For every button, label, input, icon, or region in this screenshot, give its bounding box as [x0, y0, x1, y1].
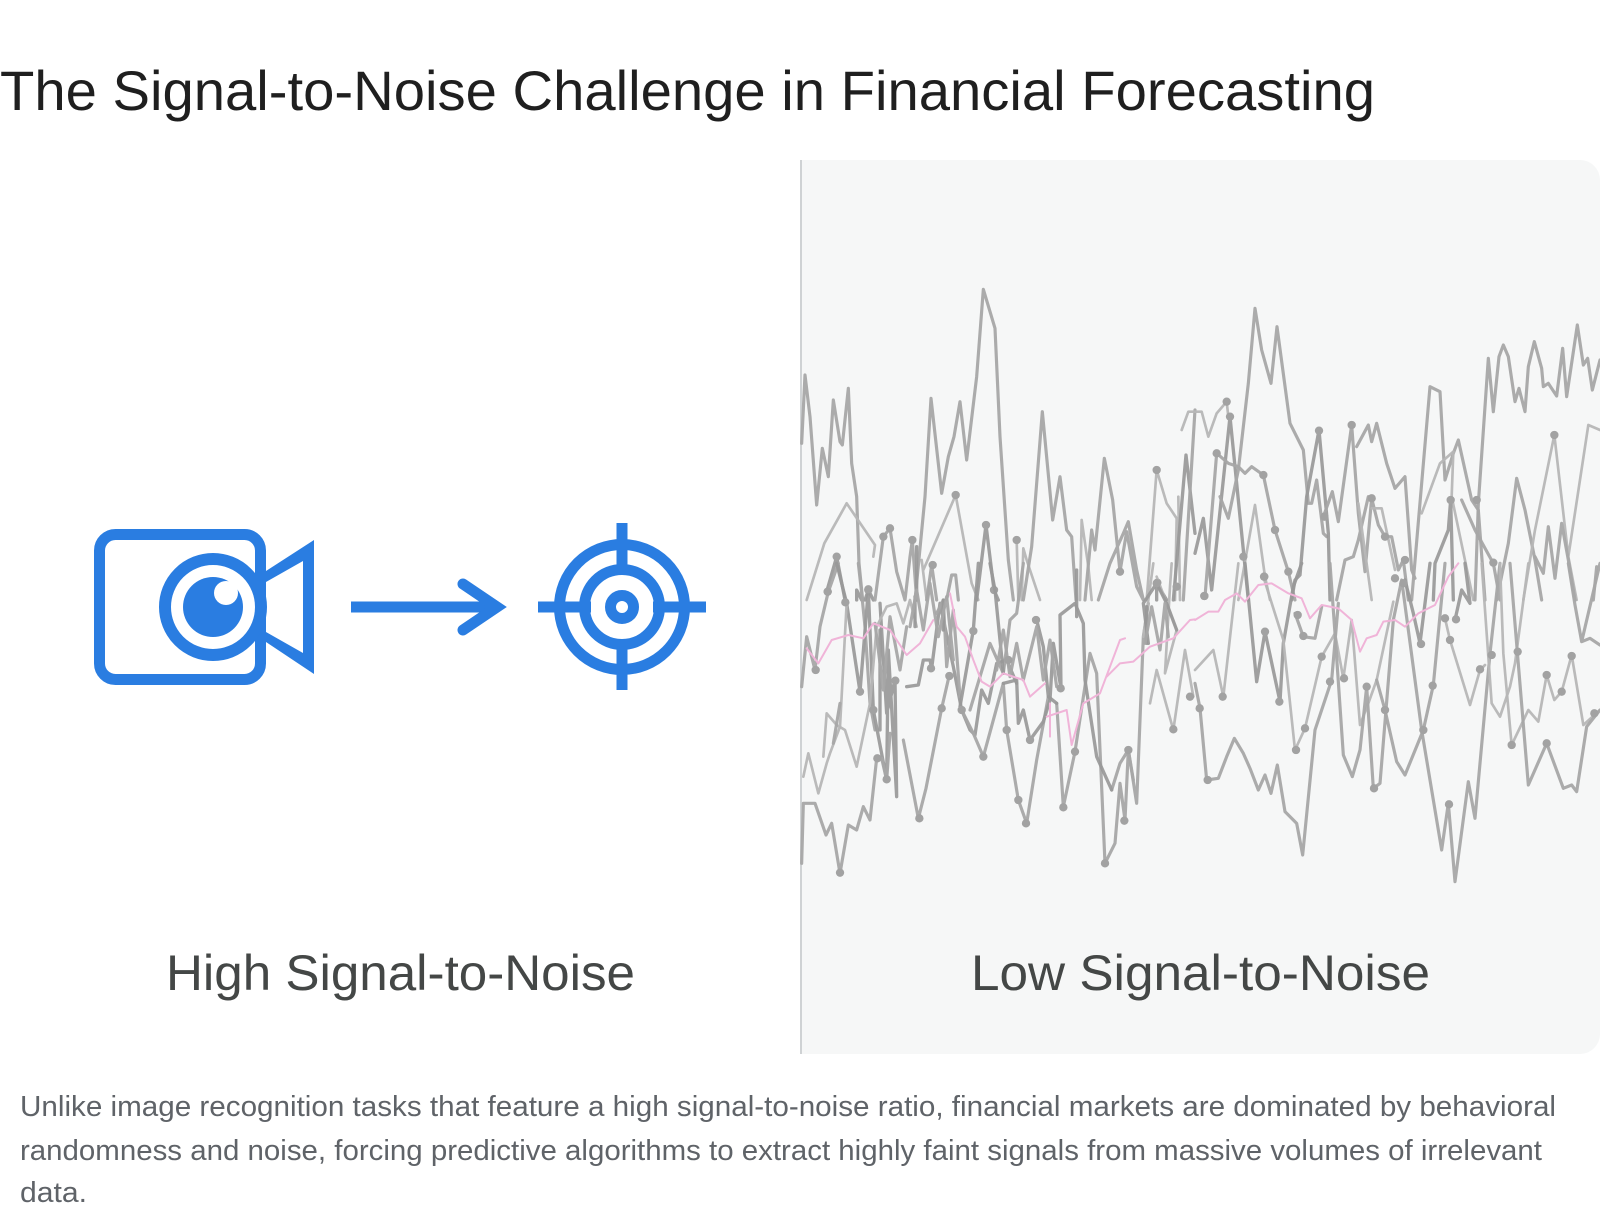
- caption text block: Unlike image recognition tasks that feature a high signal-to-noise ratio, financial markets are dominated by behavioral: [20, 1091, 1556, 1123]
- label: high signal-to-noise: High Signal-to-Noise: [166, 945, 635, 1001]
- noise lines: lower left: [802, 563, 1195, 873]
- caption text block: randomness and noise, forcing predictive algorithms to extract highly faint signals from massive volumes of irrelevant: [20, 1135, 1542, 1167]
- arrow: signal to target: [351, 584, 497, 630]
- caption text block: [20, 1091, 1556, 1209]
- icon: video camera with eye lens: [100, 534, 314, 680]
- panel: low signal-to-noise: [800, 160, 1600, 1054]
- label: low signal-to-noise: Low Signal-to-Noise: [971, 945, 1430, 1001]
- noise lines: lower right: [1195, 563, 1600, 882]
- title: The Signal-to-Noise Challenge in Financial Forecasting: [0, 59, 1375, 122]
- noise lines: upper right: [1182, 308, 1600, 600]
- noise lines: upper left: [802, 289, 1195, 600]
- caption text block: data.: [20, 1177, 87, 1209]
- chart: noisy market lines with faint signal: [802, 289, 1600, 882]
- icon: crosshair target: [538, 523, 706, 690]
